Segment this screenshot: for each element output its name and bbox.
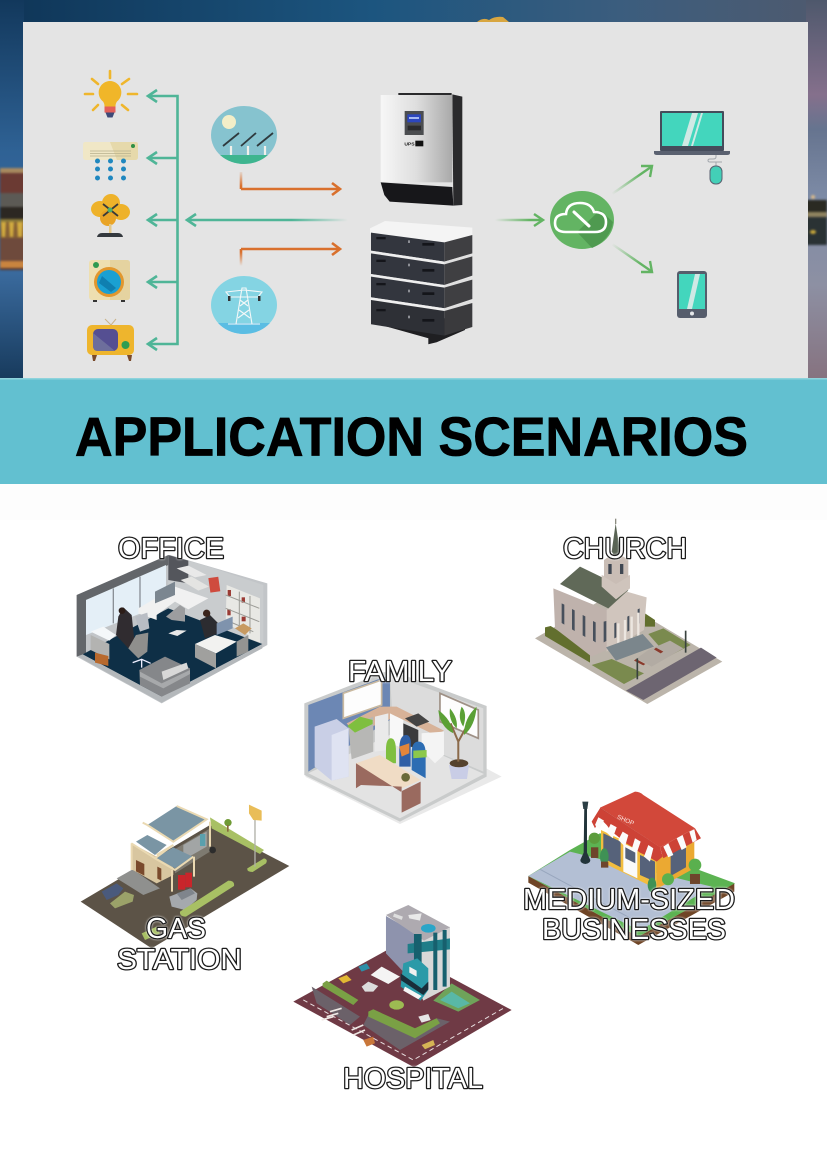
label: gas station: [117, 913, 242, 976]
scenario: hospital: [293, 905, 512, 1095]
title: APPLICATION SCENARIOS: [75, 406, 748, 468]
label: family: FAMILY: [348, 656, 452, 688]
label: medium-sized businesses: MEDIUM-SIZED: [523, 884, 735, 916]
label: medium-sized businesses: BUSINESSES: [542, 914, 726, 946]
icon: fan: [91, 194, 130, 237]
label: office: OFFICE: [118, 533, 224, 565]
label: gas station: GAS: [146, 913, 206, 945]
icon: light bulb: [85, 71, 137, 118]
label: hospital: HOSPITAL: [343, 1063, 483, 1095]
icon: smartphone: [677, 271, 707, 318]
icon: laptop and mouse: [654, 111, 730, 184]
icon: cloud monitoring: [550, 191, 614, 249]
icon: television: [87, 319, 134, 361]
scenario: church: [535, 519, 722, 704]
inverter: UPS: [404, 141, 415, 147]
icon: washing machine: [89, 260, 130, 302]
scenario: family: [304, 656, 502, 824]
label: medium-sized businesses: [523, 884, 735, 946]
background: night city photo: [0, 0, 827, 380]
arrow: solar to inverter: [241, 172, 340, 195]
icon: air conditioner: [83, 142, 138, 180]
scenario: medium-sized businesses: SHOP: [616, 814, 635, 827]
label: gas station: STATION: [117, 944, 242, 976]
inverter and battery stack: [370, 93, 472, 344]
label: church: CHURCH: [563, 533, 687, 565]
scenario: medium-sized businesses: [523, 792, 735, 946]
icon: solar panels: [211, 106, 277, 165]
arrow: grid to battery: [241, 243, 340, 266]
panel: system diagram: [23, 22, 808, 379]
arrow: battery output to appliances: [187, 214, 348, 226]
arrows: distribution to appliances: [148, 90, 178, 350]
lower white area fade: [0, 484, 827, 520]
arrow: stack to cloud: [495, 214, 543, 226]
icon: power grid tower: [211, 276, 277, 335]
arrow: cloud to laptop: [612, 166, 652, 194]
scenario: office: [77, 533, 267, 703]
banner: application scenarios: [0, 378, 827, 484]
battery stack: [370, 221, 472, 344]
inverter: [381, 93, 462, 206]
scenario: gas station: [81, 805, 289, 976]
arrow: cloud to phone: [612, 244, 652, 272]
